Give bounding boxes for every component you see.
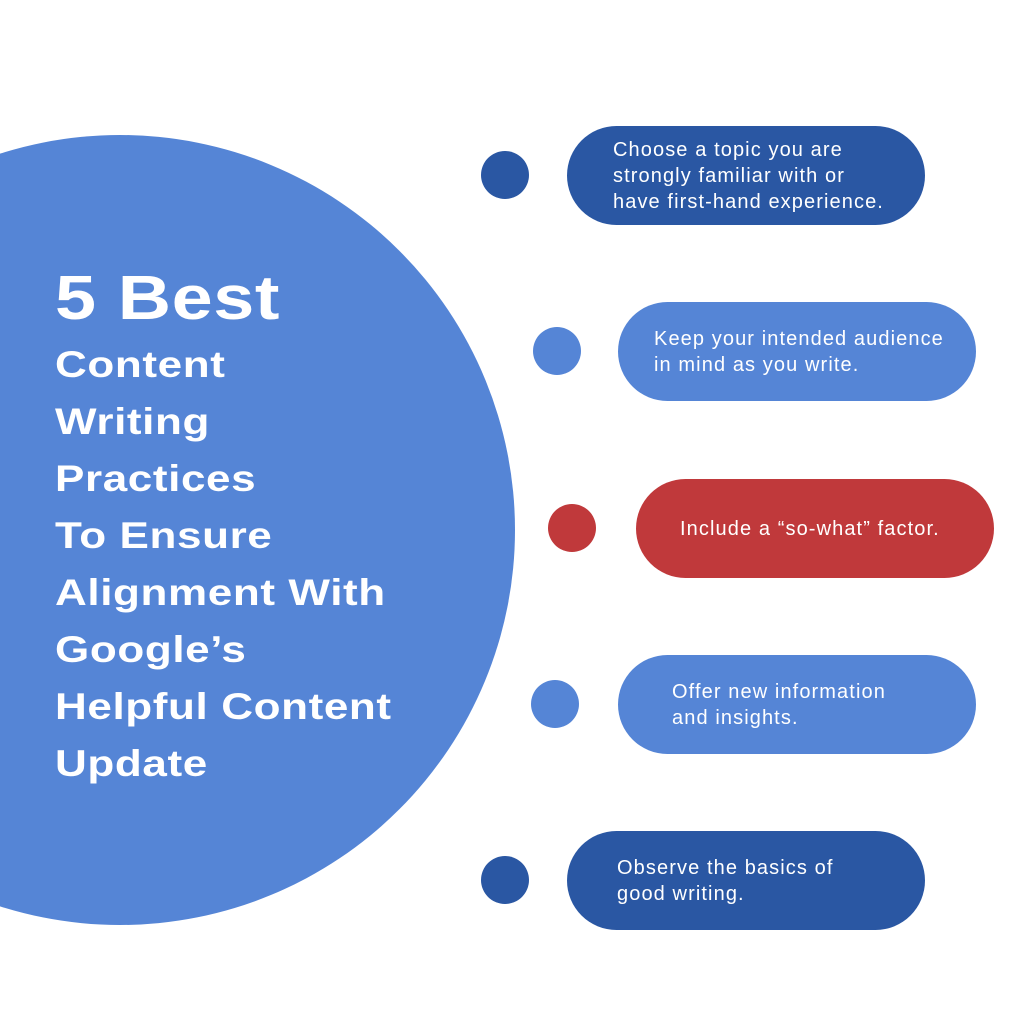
icon: dot 2 (533, 327, 581, 375)
title (55, 264, 392, 784)
item 5: Observe the basics of (617, 856, 834, 878)
item 2 (618, 302, 976, 401)
item 4 (618, 655, 976, 754)
item 5 (567, 831, 925, 930)
title: Alignment With (55, 572, 386, 613)
item 3: Include a “so-what” factor. (680, 518, 940, 540)
icon: dot 3 (548, 504, 596, 552)
icon: dot 5 (481, 856, 529, 904)
item 1: have first-hand experience. (613, 190, 884, 212)
icon: dot 1 (481, 151, 529, 199)
panel: big circle (0, 135, 515, 925)
item 1: strongly familiar with or (613, 164, 845, 186)
title: 5 Best (55, 264, 280, 333)
title: Writing (55, 401, 210, 442)
title: Practices (55, 458, 256, 499)
item 2: Keep your intended audience (654, 328, 944, 350)
item 5: good writing. (617, 882, 745, 904)
item 1: Choose a topic you are (613, 138, 843, 160)
title: Content (55, 344, 225, 385)
title: To Ensure (55, 515, 272, 556)
title: Helpful Content (55, 686, 392, 727)
item 4: Offer new information (672, 680, 886, 702)
icon: dot 4 (531, 680, 579, 728)
item 4: and insights. (672, 706, 799, 728)
item 2: in mind as you write. (654, 354, 859, 376)
item 3 (636, 479, 994, 578)
title: Update (55, 743, 208, 784)
title: Google’s (55, 629, 247, 670)
item 1 (567, 126, 925, 225)
